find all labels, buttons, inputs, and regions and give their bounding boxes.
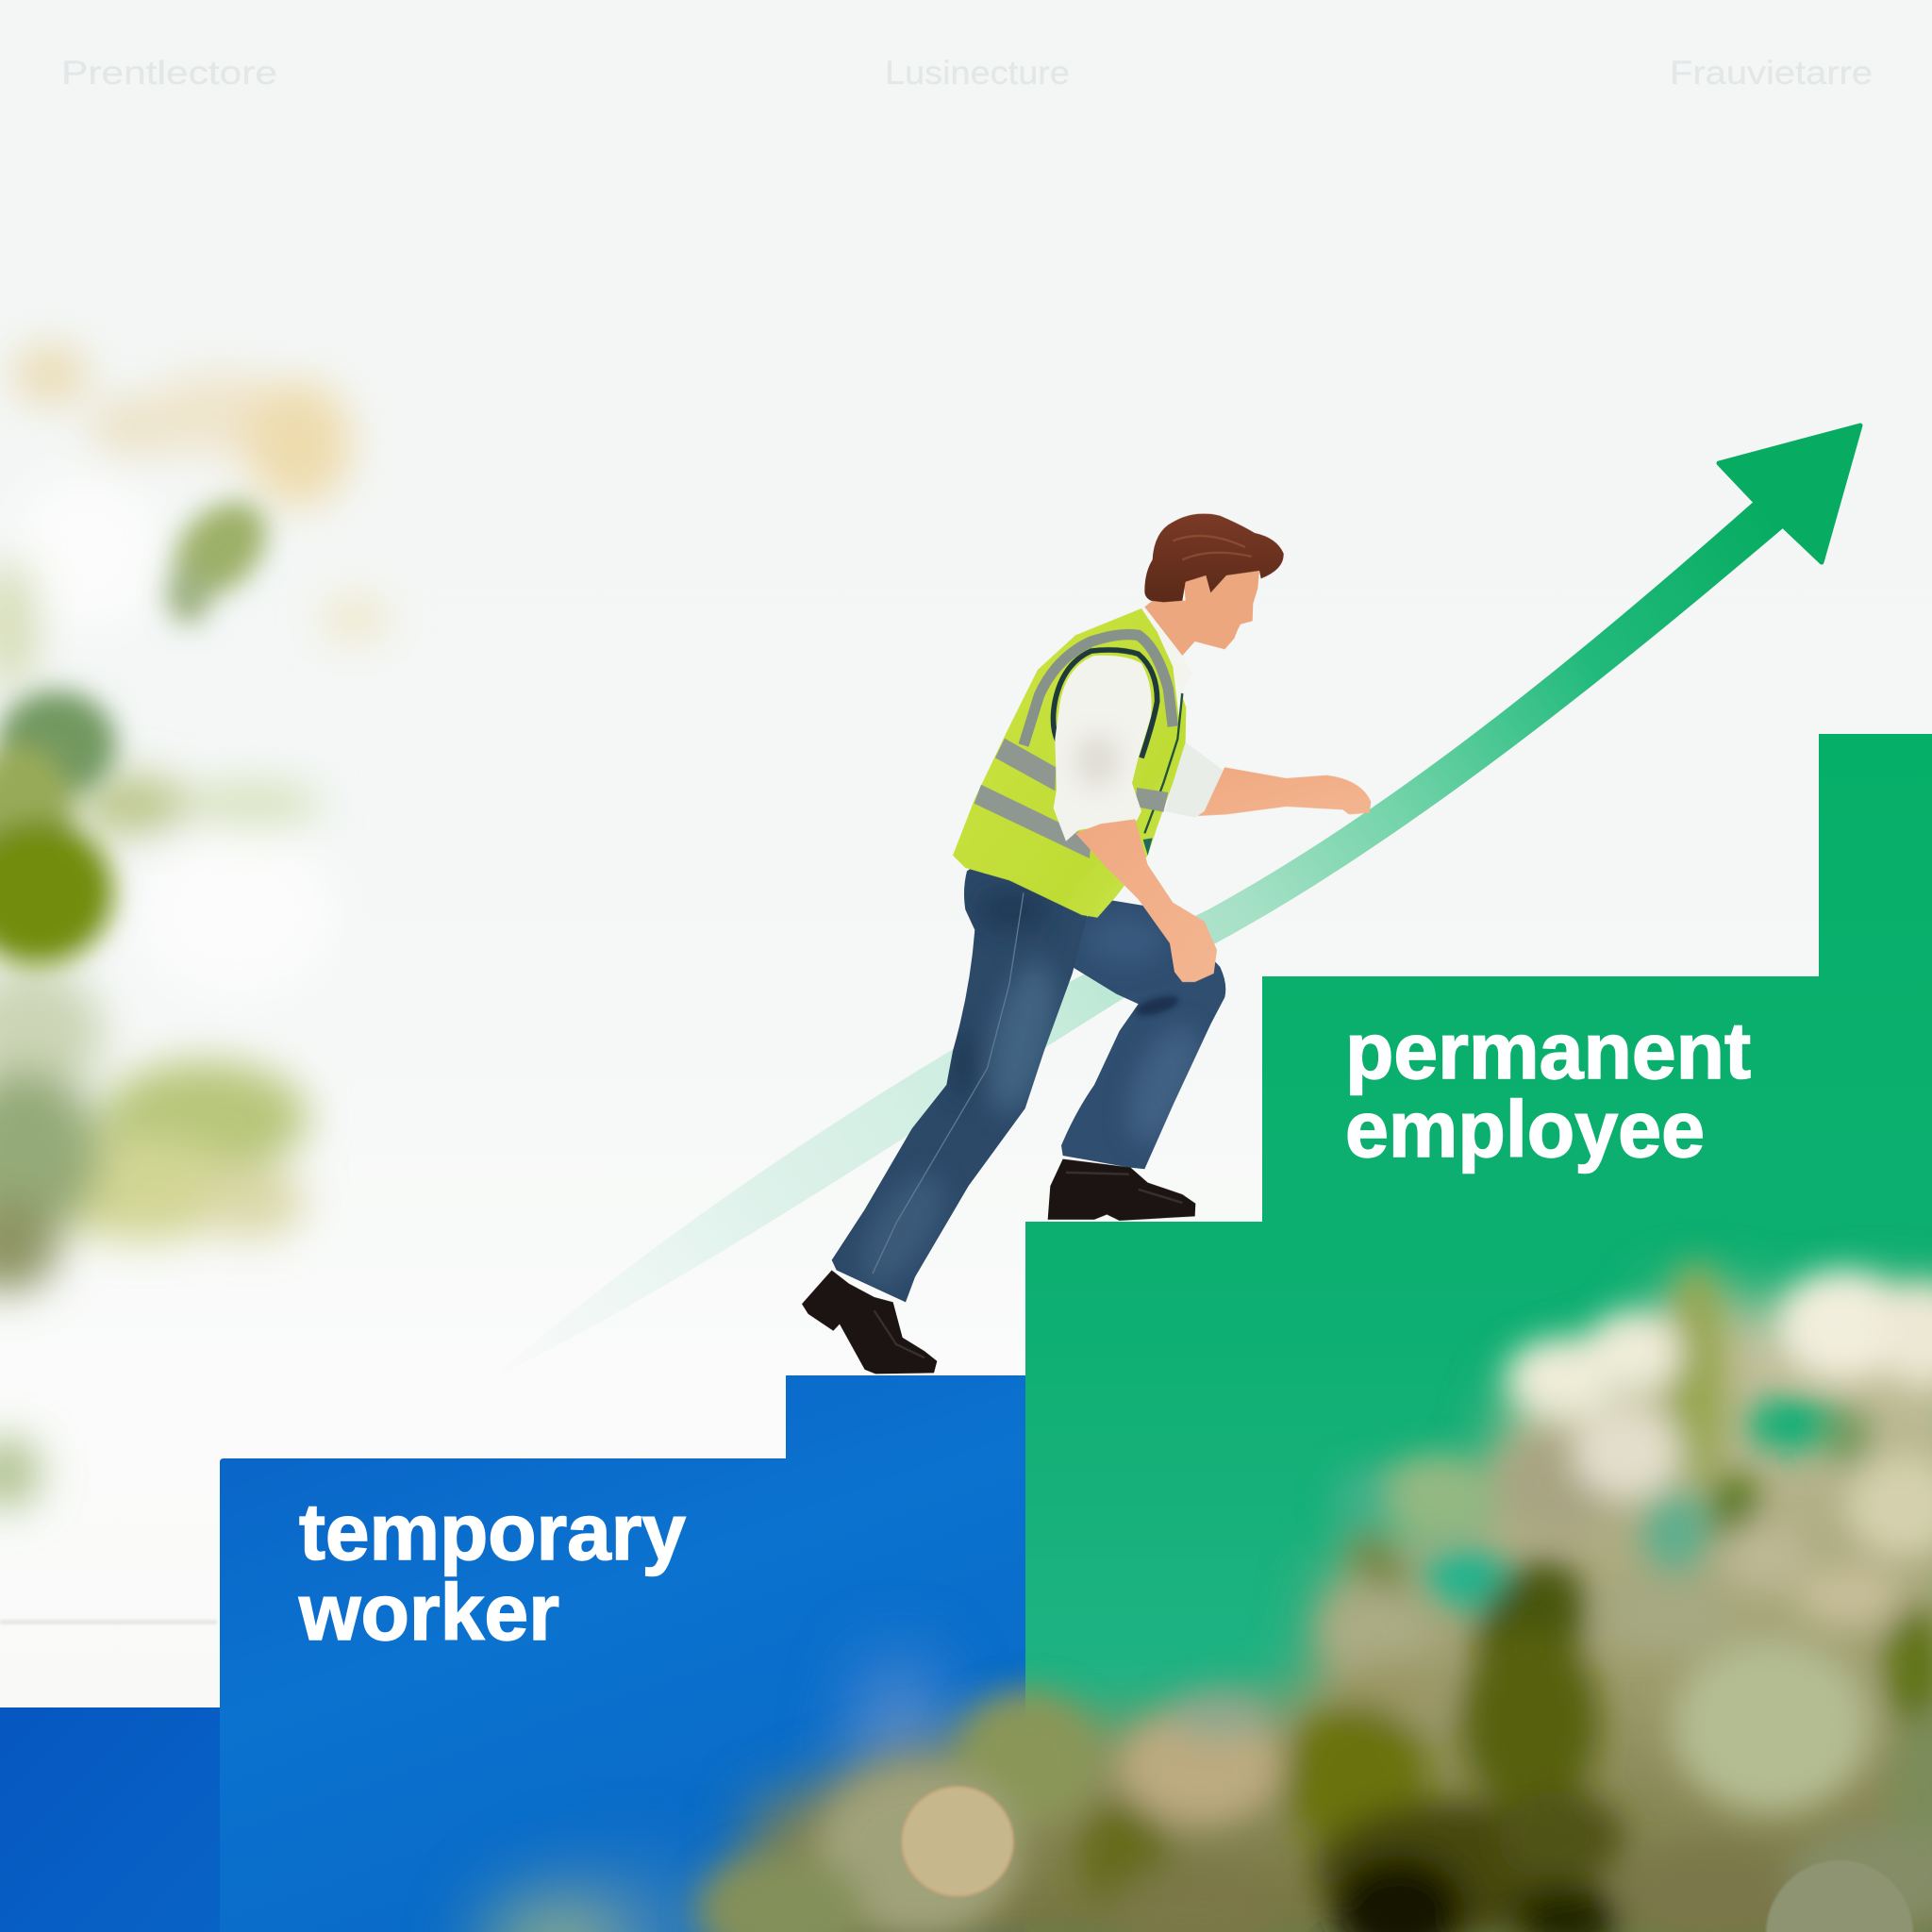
faint table line	[0, 1620, 217, 1624]
denim highlights	[845, 890, 1214, 1300]
rear boot	[802, 1270, 937, 1374]
neck and face	[1144, 571, 1259, 656]
rolled sleeve	[1054, 656, 1152, 841]
far sleeve	[1165, 742, 1224, 818]
armhole trim	[1053, 650, 1158, 758]
bokeh: gold disc	[902, 1787, 1013, 1896]
vest reflective stripes	[974, 739, 1168, 858]
trouser seam	[873, 892, 1024, 1274]
front shoe	[1048, 1159, 1195, 1221]
far arm and hand	[1198, 767, 1371, 816]
bokeh highlights	[902, 1787, 1913, 1932]
far leg	[1061, 900, 1225, 1169]
label: left: Prentlectore	[61, 55, 277, 92]
hair	[1144, 513, 1284, 602]
blossoms and leaves	[696, 1262, 1932, 1932]
stair label: permanent employee: employee	[1345, 1085, 1705, 1174]
arrow shaft	[491, 499, 1783, 1379]
vest reflective shoulder band	[1024, 634, 1173, 745]
stair label: permanent employee	[1345, 1007, 1751, 1174]
stair label: temporary worker: temporary	[299, 1488, 686, 1576]
step: temporary worker block	[220, 1375, 1025, 1932]
bokeh: pale disc	[1766, 1860, 1913, 1932]
shirt collar	[1144, 613, 1191, 701]
faded top labels	[61, 55, 1873, 92]
blurred flowers in the foreground	[696, 1262, 1932, 1932]
miniature worker figure	[802, 513, 1371, 1374]
rear leg	[832, 862, 1091, 1302]
step: lowest blue	[0, 1707, 220, 1932]
vest front edge	[1144, 693, 1182, 833]
legs and shoes	[802, 862, 1225, 1374]
green stairs	[1025, 734, 1932, 1932]
upper body	[953, 513, 1371, 982]
growth arrow	[491, 425, 1860, 1379]
hair strands	[1173, 536, 1252, 559]
stair label: temporary worker: worker	[298, 1568, 559, 1657]
blue stairs	[0, 1375, 1025, 1932]
label: right: Frauvietarre	[1670, 55, 1873, 92]
under-vest shadow	[1143, 838, 1153, 856]
stair label: temporary worker	[298, 1488, 686, 1657]
blurred foliage on the left	[0, 344, 390, 1508]
label: centre: Lusinecture	[885, 55, 1070, 92]
flower mass	[750, 1290, 1932, 1932]
arrow head	[1719, 425, 1860, 562]
high-visibility vest	[953, 608, 1186, 918]
stair label: permanent employee: permanent	[1345, 1007, 1751, 1095]
sleeve shading	[1075, 734, 1120, 788]
near arm and hand	[1075, 819, 1217, 982]
blurred foreground on blue	[480, 1657, 942, 1932]
